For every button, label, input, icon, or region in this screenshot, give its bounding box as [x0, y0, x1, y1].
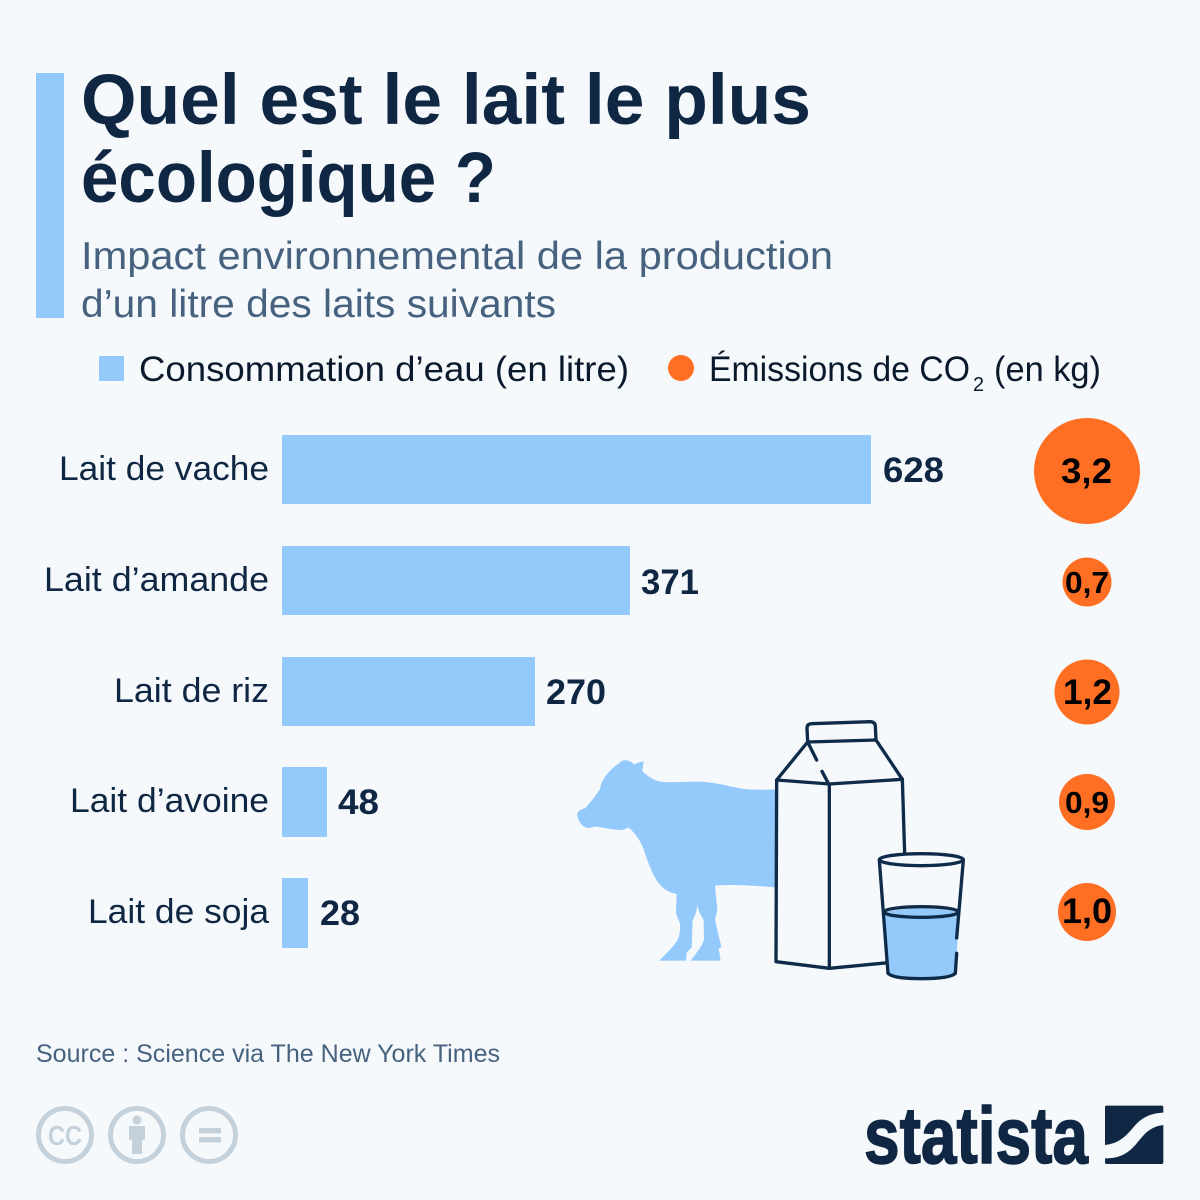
label: Lait d’amande: [44, 561, 269, 599]
licence icons: [38, 1108, 236, 1162]
icon: creative commons: [38, 1108, 92, 1162]
title: écologique ?: [81, 139, 496, 218]
source: Source : Science via The New York Times: [36, 1040, 500, 1068]
label: Lait de riz: [114, 672, 269, 710]
CO2 bubble: [1054, 660, 1120, 724]
illustration: cow, milk carton and glass: [577, 722, 963, 979]
CO2 value: 1,2: [1063, 673, 1112, 712]
legend: water swatch: [99, 356, 124, 381]
CO2 bubble: [1059, 774, 1115, 830]
title: Quel est le lait le plus: [81, 61, 811, 140]
row: Lait d'avoine: [70, 767, 1115, 837]
row: Lait de vache: [59, 418, 1140, 524]
icon: cow: [577, 760, 776, 961]
legend: CO2 label: 2: [973, 374, 984, 396]
water value: 628: [883, 451, 944, 490]
legend: CO2 label: Émissions de CO: [709, 350, 970, 389]
CO2 value: 3,2: [1061, 452, 1112, 491]
water value: 48: [338, 783, 379, 822]
subtitle: d’un litre des laits suivants: [81, 283, 556, 326]
legend: water label: Consommation d’eau (en litre): [139, 350, 629, 389]
icon: milk carton: [776, 722, 905, 968]
icon: creative commons: CC: [48, 1120, 82, 1151]
water: [884, 908, 959, 979]
statista logo: [864, 1091, 1163, 1180]
water value: 28: [320, 894, 360, 933]
CO2 bubble: [1062, 558, 1112, 606]
legend: CO2 label: (en kg): [994, 350, 1101, 389]
row: Lait de soja: [88, 878, 1116, 948]
CO2 value: 0,7: [1065, 565, 1109, 600]
water value: 270: [546, 673, 606, 712]
title: [81, 61, 811, 218]
row: Lait de riz: [114, 657, 1120, 726]
CO2 bubble: [1058, 883, 1116, 941]
legend: CO2 swatch: [668, 355, 694, 381]
CO2 bubble: [1034, 418, 1140, 524]
accent bar: [36, 73, 64, 318]
label: Lait de vache: [59, 450, 269, 488]
subtitle: Impact environnemental de la production: [81, 235, 833, 278]
CO2 value: 1,0: [1062, 892, 1112, 931]
row: Lait d'amande: [44, 546, 1112, 615]
icon: no derivatives: [182, 1108, 236, 1162]
label: Lait de soja: [88, 893, 269, 931]
water bar: [282, 435, 871, 504]
water bar: [282, 657, 535, 726]
legend: [99, 350, 1101, 396]
wordmark: statista: [864, 1091, 1088, 1180]
water value: 371: [641, 563, 699, 602]
icon: attribution: [110, 1108, 164, 1162]
icon: glass of water: [879, 854, 963, 979]
icon: statista mark: [1105, 1106, 1163, 1164]
label: Lait d’avoine: [70, 782, 269, 820]
CO2 value: 0,9: [1065, 785, 1109, 820]
subtitle: [81, 235, 833, 326]
glass outline: [879, 854, 963, 979]
legend: CO2 label: [709, 350, 1101, 396]
water bar: [282, 878, 308, 948]
water bar: [282, 546, 630, 615]
water bar: [282, 767, 327, 837]
